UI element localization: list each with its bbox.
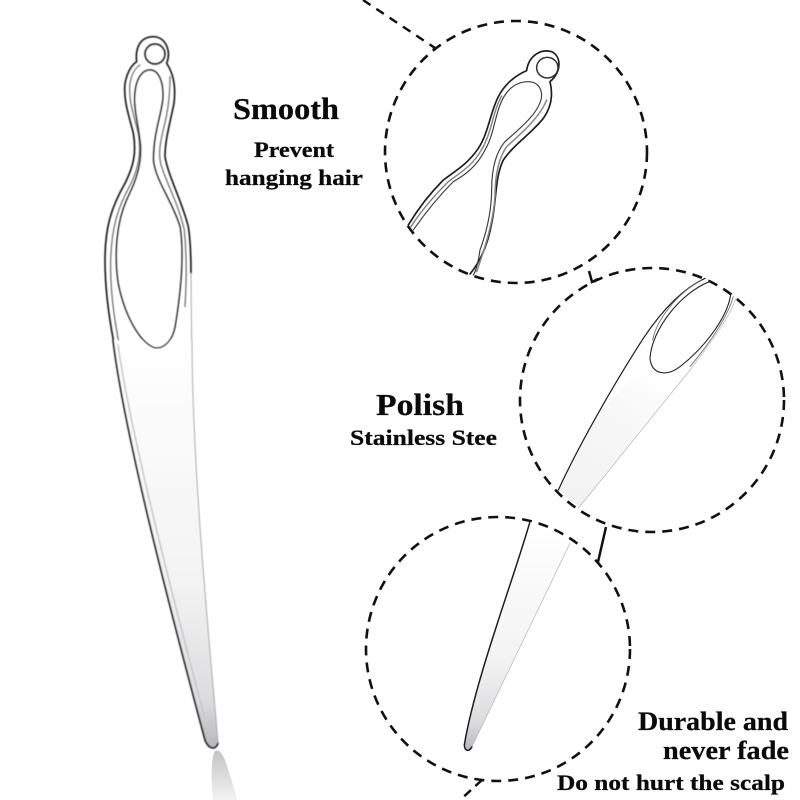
magnified blade and opening [558,278,736,508]
magnifier circle: top [385,21,647,283]
right edge of blade [192,340,218,743]
label: Smooth: Prevent [254,137,335,162]
label: Smooth [225,91,363,190]
label: Polish: Stainless Stee [350,425,497,450]
connector: top left leader [363,0,435,53]
inner bowling-pin opening [116,70,182,348]
head and shoulders [105,37,192,348]
main tool: full hair needle [105,37,218,748]
label: Durable: never fade [663,736,789,765]
magnified head of tool [408,51,559,275]
lower left edge of blade [113,340,218,748]
connector: bottom leader [460,780,482,800]
label: Durable: Durable and [638,707,789,736]
label: Durable: Do not hurt the scalp [557,770,785,795]
blade fill [113,340,218,748]
magnified blade tip [464,522,570,750]
eyelet ring [145,44,165,64]
label: Smooth: Smooth [233,91,339,126]
label: Durable [557,707,789,795]
connector: top circle to middle circle [589,271,598,282]
eyelet [537,57,558,78]
label: Polish: Polish [376,387,464,422]
lower highlight edge [118,345,204,715]
magnifier circle: middle [520,268,784,532]
magnifier circle: bottom [366,517,630,781]
connector: middle circle to bottom circle [598,527,606,562]
label: Polish [350,387,497,450]
label: Smooth: hanging hair [225,165,363,190]
reflection of tool tip [212,750,237,800]
